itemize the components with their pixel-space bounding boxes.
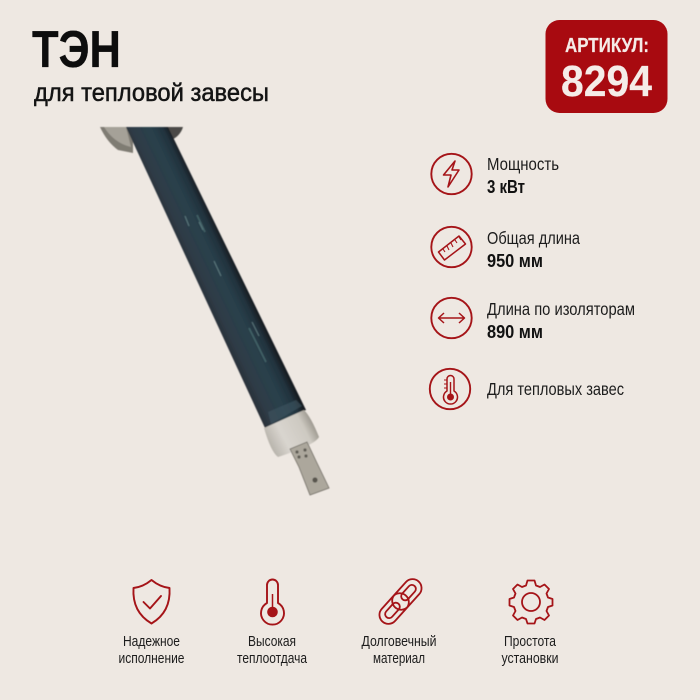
- icon: shield: [133, 580, 170, 624]
- feature: durable material: Долговечный: [362, 633, 436, 650]
- feature: reliable: исполнение: [118, 650, 184, 667]
- icon: gear: [510, 580, 552, 624]
- photo: heating element tube: [100, 127, 329, 495]
- feature: easy installation: Простота: [504, 633, 557, 650]
- tube body: [126, 127, 306, 428]
- icon: double arrow: [431, 298, 472, 338]
- subtitle: для тепловой завесы: [34, 79, 269, 107]
- badge: article number: [546, 20, 668, 113]
- icon: lightning: [431, 154, 472, 194]
- terminal: [290, 442, 329, 495]
- insulator: [264, 410, 319, 457]
- badge: article number: 8294: [561, 57, 652, 106]
- icon: chain link: [376, 575, 425, 628]
- spec: insulator length: [431, 298, 635, 342]
- feature: reliable: [118, 580, 184, 667]
- spec: insulator length: Длина по изоляторам: [487, 299, 635, 319]
- badge: article number: АРТИКУЛ:: [565, 35, 649, 57]
- spec: power: 3 кВт: [487, 177, 525, 197]
- spec: application: Для тепловых завес: [487, 379, 624, 399]
- icon: ruler: [431, 227, 472, 267]
- spec: power: [431, 154, 559, 197]
- feature: easy installation: [502, 580, 558, 667]
- feature: durable material: материал: [373, 650, 425, 667]
- feature: reliable: Надежное: [123, 633, 180, 650]
- spec: total length: Общая длина: [487, 228, 580, 248]
- spec: insulator length: 890 мм: [487, 322, 543, 342]
- feature: durable material: [362, 575, 436, 667]
- flange: [100, 127, 133, 153]
- feature: high heat output: [237, 580, 308, 667]
- title: ТЭН: [32, 21, 121, 79]
- icon: thermometer: [261, 580, 284, 625]
- feature: high heat output: Высокая: [248, 633, 296, 650]
- spec: application: [430, 369, 624, 409]
- feature: high heat output: теплоотдача: [237, 650, 308, 667]
- feature: easy installation: установки: [502, 650, 558, 667]
- spec: power: Мощность: [487, 154, 559, 174]
- spec: total length: 950 мм: [487, 251, 543, 271]
- icon: thermometer: [430, 369, 470, 409]
- spec: total length: [431, 227, 580, 271]
